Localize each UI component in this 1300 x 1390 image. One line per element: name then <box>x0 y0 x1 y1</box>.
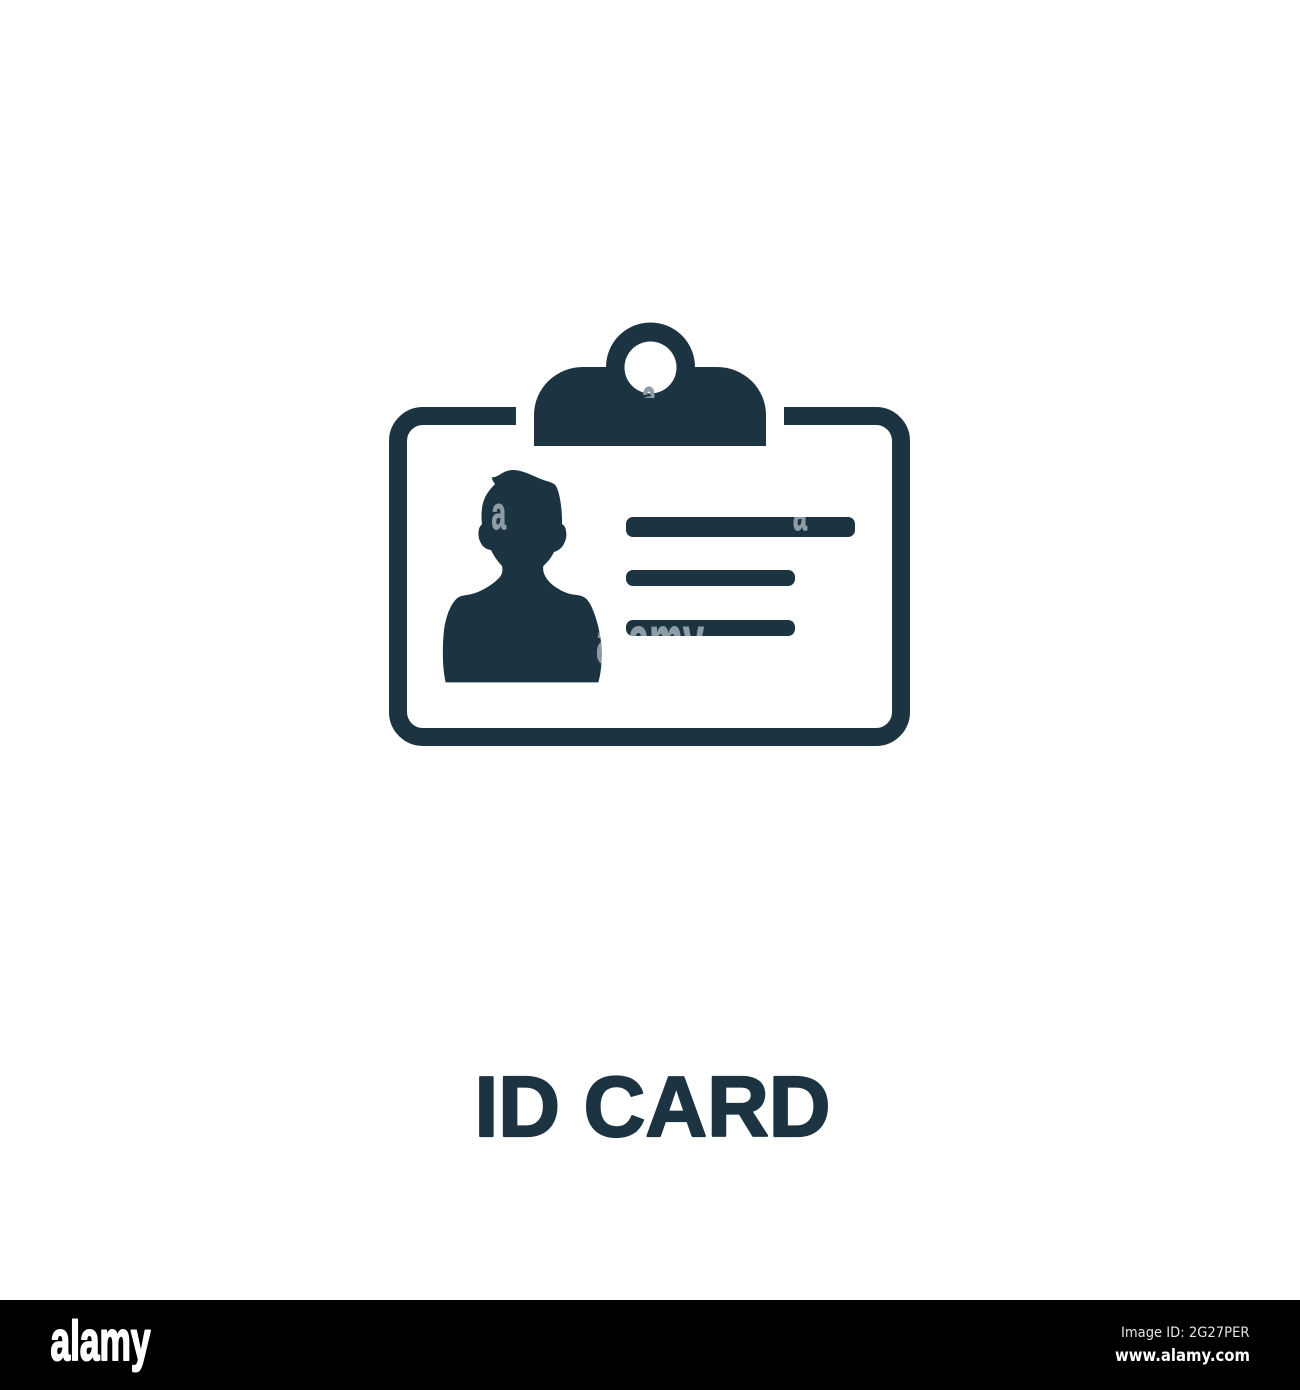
icon: ID card badge <box>398 323 901 737</box>
person silhouette <box>443 470 619 682</box>
badge clip with hole <box>534 323 766 446</box>
text line 2 <box>626 570 795 586</box>
website: www.alamy.com <box>1115 1346 1250 1365</box>
text line 1: a <box>793 488 807 540</box>
badge clip with hole: a <box>642 370 656 422</box>
text line 3 <box>626 620 795 636</box>
footer logo: alamy <box>50 1309 150 1372</box>
text line 1 <box>626 517 855 537</box>
image id: Image ID: 2G27PER <box>1121 1325 1250 1341</box>
text line 3: amy <box>628 602 704 678</box>
person silhouette: a <box>596 602 619 678</box>
footer bar <box>0 1300 1300 1390</box>
title: ID CARD <box>474 1060 830 1155</box>
card frame outline <box>398 416 901 737</box>
person silhouette: a <box>492 487 506 539</box>
